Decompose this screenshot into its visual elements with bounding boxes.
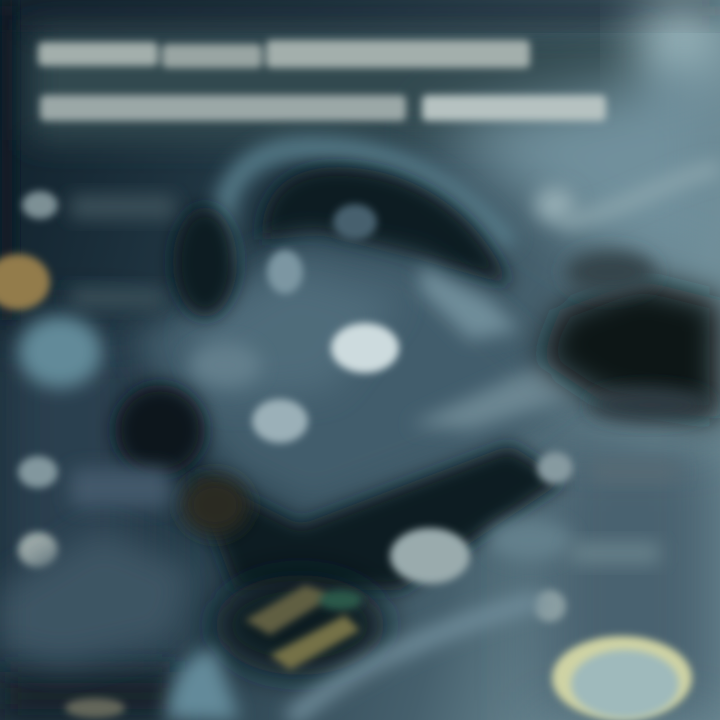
gold bars: [245, 585, 362, 670]
padlock: shackle: [224, 148, 510, 285]
right side items: [390, 168, 720, 622]
padlock: body: [130, 204, 585, 510]
bottom cables: [65, 600, 540, 720]
dark shadows: [0, 207, 720, 720]
title: [38, 40, 606, 121]
left side items: [0, 191, 195, 665]
coin: [552, 636, 692, 720]
